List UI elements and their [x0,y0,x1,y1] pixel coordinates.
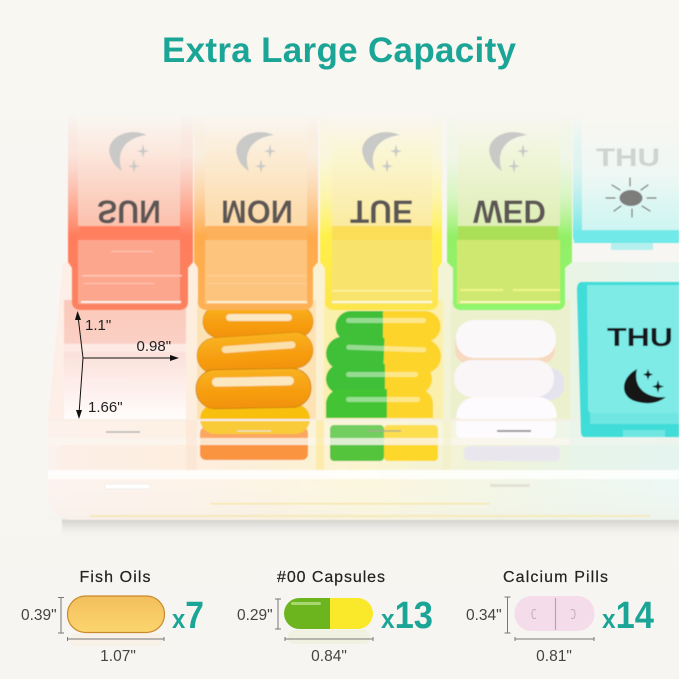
capsule reflection [288,630,370,644]
fish oil capsule 4 [200,404,310,434]
count: x14 [602,595,654,637]
lid body [320,115,442,310]
compartment: Monday [197,300,316,420]
tray [48,262,679,539]
icon: moon [109,132,149,173]
pill [514,596,594,631]
capsule 3 [326,364,432,394]
icon: moon [489,132,529,173]
heading: #00 Capsules [277,569,385,586]
item: #00 capsules [237,569,433,665]
label: WED: WED [473,194,546,230]
width label: 0.98 in: 0.98" [136,338,171,355]
lid front face [590,413,679,424]
lower lid face [332,240,432,304]
label: THU faded: THU [596,144,660,172]
green and yellow capsules [325,311,442,461]
lid front band [574,231,679,243]
icon: sun [606,178,656,217]
compartment: Sunday, empty [64,300,186,420]
icon: moon [236,132,276,173]
lid: THU morning, open [573,115,679,250]
lid: THU night, closed [577,282,679,437]
icon: moon [362,132,402,173]
vertical dimension [275,599,281,629]
white highlight strip [48,470,679,479]
compartment: Tuesday [324,300,443,420]
width value: 1.07" [100,648,136,665]
lid lower tab [623,430,665,437]
inner panel [205,115,307,226]
title: Extra Large Capacity [162,31,517,70]
tray shadow [62,519,679,539]
lid tab [611,243,653,250]
count: x7 [172,595,204,637]
fish oil capsule 1 [203,305,313,338]
lower milky band [48,479,679,520]
heading: Calcium Pills [503,569,608,586]
label: THU: THU [607,322,673,352]
height value: 0.39" [21,607,57,624]
horizontal dimension [68,637,164,641]
vertical dimension [504,597,510,633]
count: x13 [381,595,433,637]
inner panel [78,115,180,226]
lid: WED [447,115,572,310]
height label: 1.66 in: 1.66" [88,399,123,416]
inner panel [582,115,679,230]
inner panel [458,115,560,226]
icon: moon and stars [624,369,666,403]
divider columns [186,420,679,470]
heading: Fish Oils [80,569,150,586]
lower notches [105,484,530,489]
lid body [68,115,193,310]
pill 2 [454,360,554,397]
lower lid face [205,240,307,304]
height label: 1.1 in: 1.1" [85,317,111,334]
lid: TUE [320,115,442,310]
rim lower band [48,438,679,445]
dimension arrows [75,311,179,419]
lower lid tint [457,240,560,304]
vertical dimension [58,598,64,633]
lid lines [81,251,182,303]
saturated band [458,226,558,240]
pill 3 [456,397,557,418]
saturated band [332,226,432,240]
label: MON: MON [221,194,293,230]
width value: 0.84" [311,648,347,665]
lid lines [460,289,560,303]
pill shadows [455,330,564,400]
horizontal dimension [515,637,594,641]
lid: MON [194,115,318,310]
arrow heads [75,311,179,419]
saturated band [80,226,180,240]
lid body [447,115,572,310]
arrow lines [78,316,174,414]
horizontal dimension [285,637,373,641]
lid lines [207,275,307,303]
item: calcium pills [466,569,654,665]
height value: 0.34" [466,607,502,624]
lower lid face [78,240,180,304]
tray body [48,262,679,520]
compartment: Wednesday [451,300,570,420]
label: TUE: TUE [350,194,413,230]
pill 1 [456,320,556,358]
width value: 0.81" [536,648,572,665]
height value: 0.29" [237,607,273,624]
capsule 2 [325,336,442,374]
capsule [284,598,373,629]
tray front rim [48,419,679,520]
fish oil capsule 2 [196,331,314,375]
capsule 4 [326,389,433,418]
calcium pills [454,320,564,461]
fish oil capsule 3 [196,368,311,409]
label: SUN: SUN [97,194,161,230]
lower stripes [90,503,650,517]
capsule reflection [330,425,438,461]
lid body [577,282,679,437]
fish oil capsules [196,305,314,460]
lid body [573,115,679,243]
inner panel [332,115,432,226]
saturated band [207,226,307,240]
lid lines [332,290,432,303]
lid top face [587,285,679,413]
rim notch marks [106,431,531,432]
lid body [194,115,318,310]
capsule reflection [70,633,162,647]
rim top band [48,420,679,438]
pill reflection [456,418,560,461]
capsule 1 [336,311,440,342]
item: fish oils [21,569,204,665]
capsule [68,596,164,632]
lid: SUN [68,115,193,310]
fish oil reflection [200,427,308,460]
